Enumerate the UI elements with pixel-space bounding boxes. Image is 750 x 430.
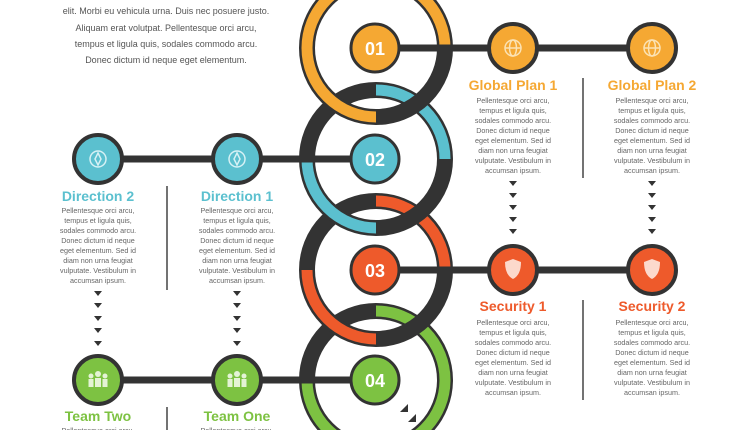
text block: global plan 2: tempus et ligula quis, [618,106,686,115]
text block: security 1: Donec dictum id neque [476,348,550,357]
text block: global plan 1: accumsan ipsum. [485,166,541,175]
text block: global plan 1 [469,77,558,175]
icon: people [88,371,108,387]
arrows: global plan 1 [509,181,517,234]
text block: direction 1: tempus et ligula quis, [203,216,271,225]
text block: direction 2: diam non urna feugiat [63,256,133,265]
node: team two [74,356,122,404]
text block: direction 1: Direction 1 [201,188,273,204]
small arrows near ring 4 [400,404,416,422]
node: direction 2 [74,135,122,183]
ring 1 [307,0,445,117]
node: global plan 2 [628,24,676,72]
text block: global plan 1: diam non urna feugiat [478,146,548,155]
text block: direction 1: diam non urna feugiat [202,256,272,265]
arrows: direction 1 [233,291,241,346]
icon: globe [505,40,521,56]
icon: compass [229,151,245,167]
text block: security 1: eget elementum. Sed id [475,358,551,367]
badge 02 [351,135,399,183]
text block: direction 1: vulputate. Vestibulum in [199,266,275,275]
text block: global plan 2: diam non urna feugiat [617,146,687,155]
text block: direction 2: vulputate. Vestibulum in [60,266,136,275]
text block: direction 1: accumsan ipsum. [209,276,265,285]
badge 03: 03 [365,261,385,281]
text block: security 1: accumsan ipsum. [485,388,541,397]
text block: global plan 2: vulputate. Vestibulum in [614,156,690,165]
text block: global plan 1: tempus et ligula quis, [479,106,547,115]
text block: security 2: Pellentesque orci arcu, [615,318,689,327]
text block: direction 2: tempus et ligula quis, [64,216,132,225]
text block: global plan 1: sodales commodo arcu. [475,116,551,125]
icon: compass [90,151,106,167]
text block: global plan 1: Pellentesque orci arcu, [476,96,550,105]
ring 4 [307,311,445,430]
text block: security 1: Security 1 [480,298,547,314]
text block: security 2: diam non urna feugiat [617,368,687,377]
icon: shield [644,259,660,279]
text block: global plan 2: accumsan ipsum. [624,166,680,175]
text block: security 1 [475,298,551,397]
ring 2 [307,90,445,228]
text block: security 1: diam non urna feugiat [478,368,548,377]
intro text [63,0,269,65]
text block: team one [200,408,274,430]
text block: direction 2: Donec dictum id neque [61,236,135,245]
text block: security 1: tempus et ligula quis, [479,328,547,337]
arrows: global plan 2 [648,181,656,234]
text block: direction 2: accumsan ipsum. [70,276,126,285]
text block: global plan 2: Donec dictum id neque [615,126,689,135]
text block: global plan 2: sodales commodo arcu. [614,116,690,125]
arrows: direction 2 [94,291,102,346]
badge 02: 02 [365,150,385,170]
badge 04: 04 [365,371,385,391]
text block: security 2: Security 2 [619,298,686,314]
ring 3 [307,201,445,339]
text block: direction 1: Donec dictum id neque [200,236,274,245]
text block: global plan 2 [608,77,697,175]
icon: people [228,371,246,387]
intro text: elit. Morbi eu vehicula urna. Duis nec posuere justo. [63,6,269,16]
text block: direction 2: sodales commodo arcu. [60,226,136,235]
text block: team one: Team One [204,408,271,424]
text block: global plan 2: Pellentesque orci arcu, [615,96,689,105]
dividers [167,78,583,430]
node: security 2 [628,246,676,294]
text block: security 1: vulputate. Vestibulum in [475,378,551,387]
text block: security 2 [614,298,690,397]
text block: global plan 1: Global Plan 1 [469,77,558,93]
text block: security 2: vulputate. Vestibulum in [614,378,690,387]
badge 01: 01 [365,39,385,59]
badge 04 [351,356,399,404]
text block: security 2: eget elementum. Sed id [614,358,690,367]
text block: global plan 1: vulputate. Vestibulum in [475,156,551,165]
text block: direction 2: eget elementum. Sed id [60,246,136,255]
badge 01 [351,24,399,72]
text block: security 2: accumsan ipsum. [624,388,680,397]
text block: global plan 1: Donec dictum id neque [476,126,550,135]
text block: security 2: tempus et ligula quis, [618,328,686,337]
text block: direction 1 [199,188,275,285]
redraw lines inside rings [300,48,452,380]
node: global plan 1 [489,24,537,72]
badge 03 [351,246,399,294]
node: security 1 [489,246,537,294]
node: team one [213,356,261,404]
node: direction 1 [213,135,261,183]
icon: shield [505,259,521,279]
icon: globe [644,40,660,56]
text block: direction 2: Pellentesque orci arcu, [61,206,135,215]
text block: global plan 2: eget elementum. Sed id [614,136,690,145]
text block: security 2: sodales commodo arcu. [614,338,690,347]
text block: security 1: sodales commodo arcu. [475,338,551,347]
connector lines [98,48,652,380]
text block: security 1: Pellentesque orci arcu, [476,318,550,327]
text block: global plan 2: Global Plan 2 [608,77,697,93]
text block: direction 1: sodales commodo arcu. [199,226,275,235]
text block: direction 2: Direction 2 [62,188,134,204]
intro text: Aliquam erat volutpat. Pellentesque orci arcu, [75,23,257,33]
text block: direction 2 [60,188,136,285]
text block: team two: Team Two [65,408,131,424]
text block: direction 1: Pellentesque orci arcu, [200,206,274,215]
text block: direction 1: eget elementum. Sed id [199,246,275,255]
text block: team two [61,408,135,430]
text block: security 2: Donec dictum id neque [615,348,689,357]
intro text: tempus et ligula quis, sodales commodo arcu. [75,39,257,49]
text block: global plan 1: eget elementum. Sed id [475,136,551,145]
intro text: Donec dictum id neque eget elementum. [85,55,247,65]
